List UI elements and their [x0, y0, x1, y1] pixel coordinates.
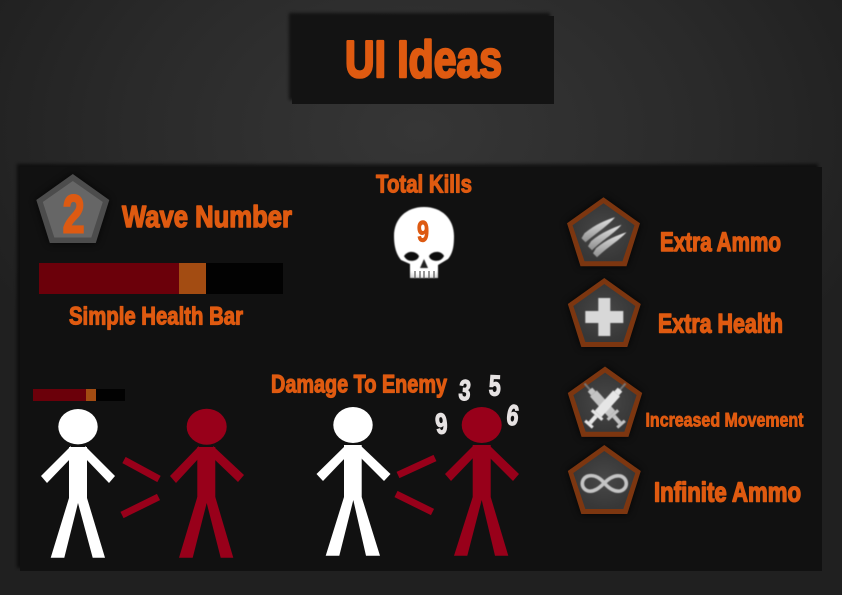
icon: increased movement — [568, 367, 642, 437]
white stick figure, left scene — [41, 409, 115, 558]
white stick figure, right scene — [316, 407, 390, 556]
wave number badge — [36, 174, 109, 244]
small health bar — [33, 389, 125, 401]
simple health bar — [39, 263, 283, 294]
label: damage to enemy: Damage To Enemy — [271, 370, 447, 398]
damage numbers: 5 — [488, 370, 501, 403]
label: simple health bar: Simple Health Bar — [69, 302, 243, 330]
strike marks, right scene — [396, 458, 435, 512]
damage numbers — [434, 370, 521, 441]
damage numbers: 3 — [457, 375, 472, 407]
label: extra health: Extra Health — [658, 308, 783, 338]
damage numbers: 9 — [434, 408, 449, 441]
red stick figure, right scene — [445, 407, 519, 556]
label: wave number: Wave Number — [122, 199, 292, 234]
label: infinite ammo: Infinite Ammo — [654, 476, 801, 508]
kill count: 9 — [417, 216, 429, 248]
icon: infinite ammo — [568, 445, 641, 514]
damage numbers: 6 — [505, 399, 521, 433]
label: total kills: Total Kills — [376, 170, 472, 198]
icon: skull with kill count — [394, 207, 454, 278]
label: extra ammo: Extra Ammo — [660, 227, 781, 257]
red stick figure, left scene — [170, 409, 244, 558]
strike marks, left scene — [122, 460, 159, 515]
wave digit: 2 — [63, 184, 85, 244]
main panel — [17, 164, 822, 571]
label: increased movement: Increased Movement — [646, 410, 804, 432]
icon: extra health — [568, 278, 641, 347]
title: UI Ideas — [345, 31, 502, 89]
icon: extra ammo — [567, 197, 640, 266]
title panel — [289, 13, 554, 104]
